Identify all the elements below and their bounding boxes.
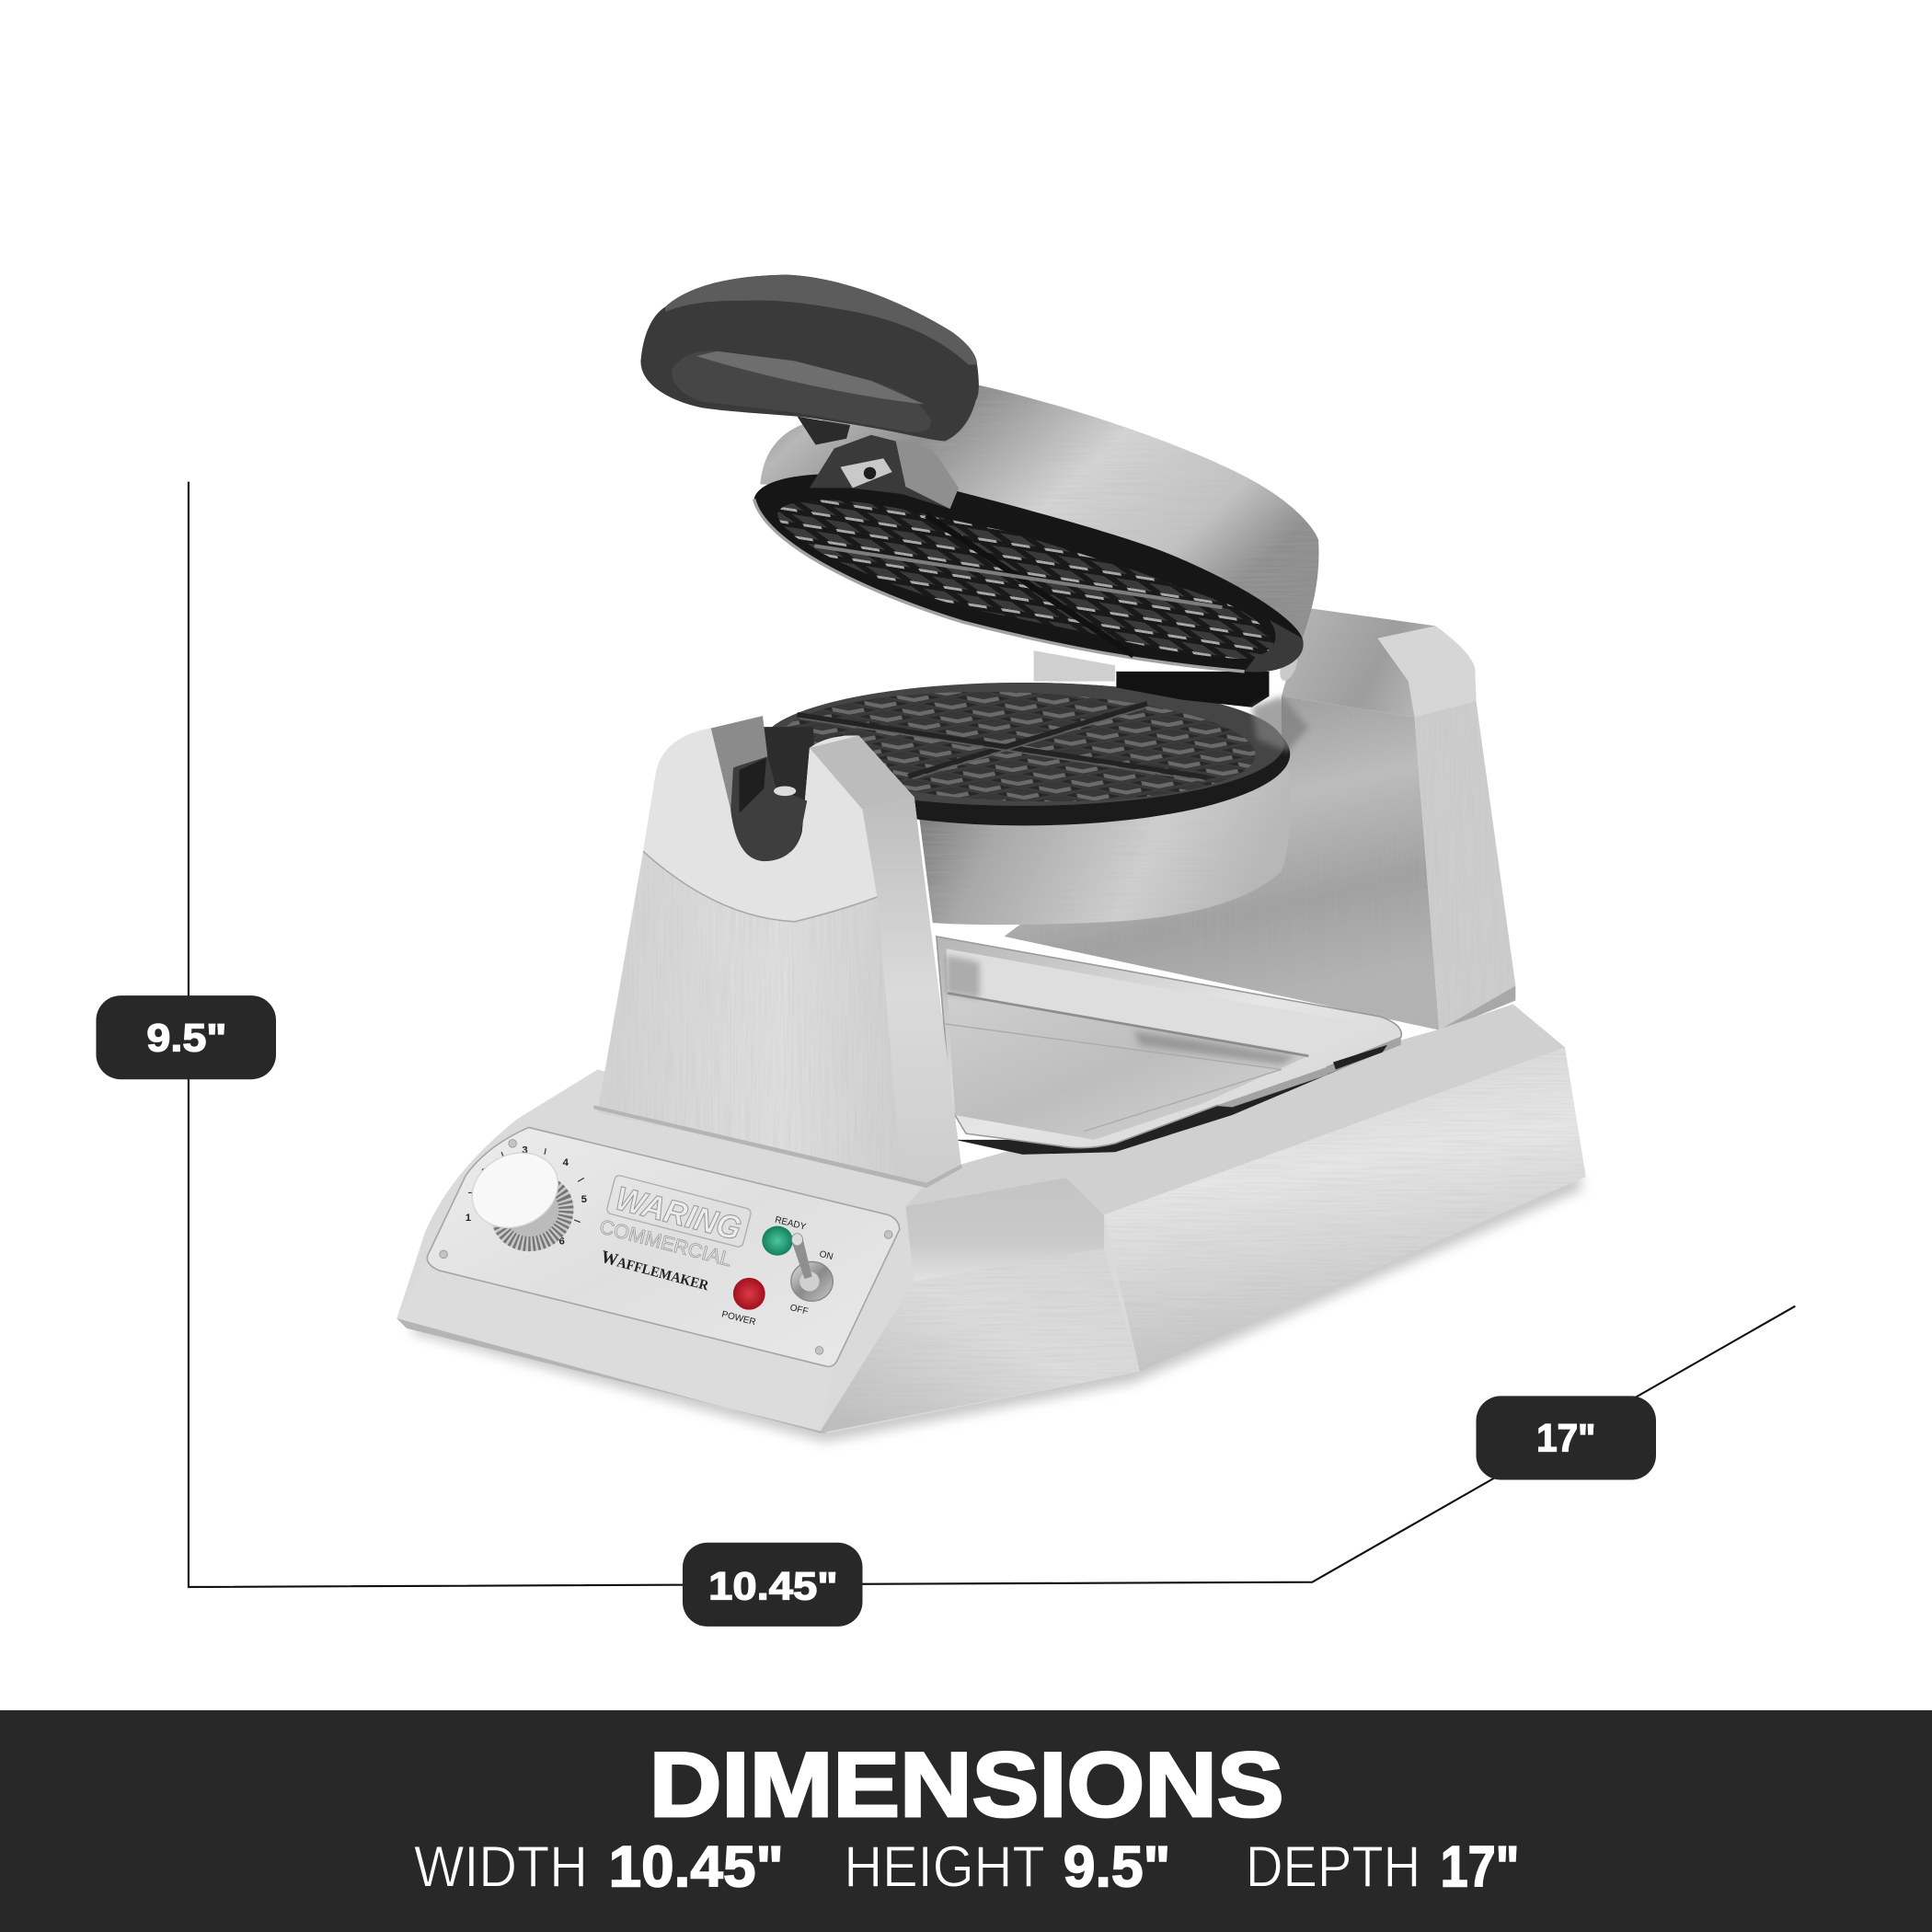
logo: Waring Commercial [597,1174,752,1272]
dimensions summary: DEPTH [1246,1834,1420,1899]
upper lid [754,385,1318,672]
drip tray [937,937,1401,1155]
panel screws [440,1140,892,1354]
control labels [720,1215,834,1328]
lid hinge bracket [810,435,959,509]
badge: depth 17 [1476,1396,1656,1479]
control panel plate [427,1127,900,1366]
dimensions summary: 9.5" [1064,1834,1170,1899]
logo: Waring Commercial: WARING [612,1179,745,1248]
control labels: POWER [720,1309,757,1328]
badge: depth 17: 17" [1536,1417,1595,1461]
badge: width 10.45 [683,1543,863,1627]
control labels: READY [774,1215,807,1233]
dial scale: 5 [581,1194,588,1205]
dial scale: 2 [481,1167,488,1179]
dimensions summary: 17" [1441,1834,1519,1899]
ready light [762,1226,793,1256]
badge: width 10.45: 10.45" [708,1564,838,1608]
base shadow [413,1170,1583,1442]
dimensions summary [414,1834,1519,1899]
dial scale: 3 [522,1145,528,1156]
dial scale [466,1145,588,1248]
control labels: ON [818,1249,834,1262]
heading: DIMENSIONS [650,1734,1284,1836]
badge: height 9.5: 9.5" [146,1016,226,1060]
toggle switch [791,1234,833,1301]
dial scale: 1 [466,1213,472,1224]
product name: WAFFLEMAKER [599,1248,712,1295]
bottom band [0,1710,1932,1932]
dial scale: 4 [563,1157,569,1168]
control labels: OFF [788,1303,810,1317]
handle [640,275,979,444]
dial scale: 6 [559,1236,565,1248]
product: waffle maker [397,275,1586,1442]
lid hinge [1116,648,1308,752]
logo: Waring Commercial: COMMERCIAL [597,1215,734,1271]
dimensions summary: 10.45" [609,1834,784,1899]
base body [397,1005,1586,1433]
badge: height 9.5 [96,995,276,1079]
left column [594,716,962,1188]
temperature knob [460,1139,577,1255]
dimension lines [189,482,1795,1587]
back column [1005,607,1515,1032]
power light [733,1278,765,1310]
dimensions summary: WIDTH [414,1834,588,1899]
dimensions summary: HEIGHT [844,1834,1045,1899]
lower waffle plate with cup [727,683,1290,925]
